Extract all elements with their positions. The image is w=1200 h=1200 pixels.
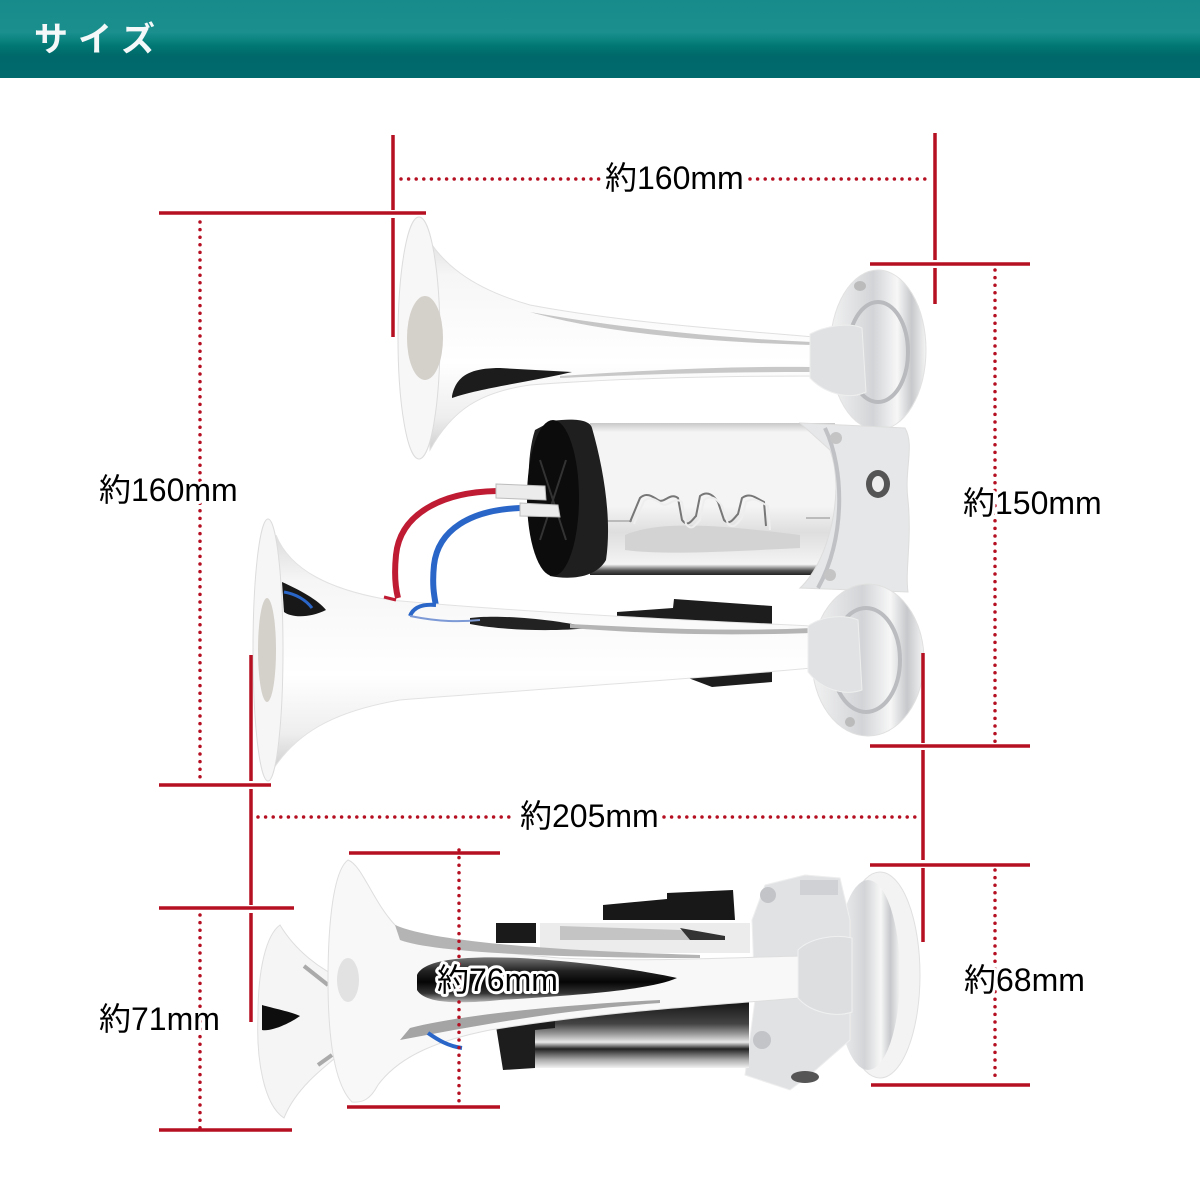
wire connectors bbox=[496, 484, 560, 517]
side view collar bbox=[798, 936, 852, 1014]
upper horn bell bbox=[398, 217, 440, 459]
lower horn collar bbox=[808, 617, 862, 692]
heading: サイズ bbox=[34, 20, 165, 59]
label 160mm width: 約160mm bbox=[605, 160, 744, 196]
product photo: lower horn bbox=[253, 519, 924, 781]
lower flange of upper horn bbox=[830, 270, 926, 430]
black connector behind horn bbox=[617, 599, 772, 687]
label 205mm: 約205mm bbox=[520, 798, 659, 834]
label 160mm height: 約160mm bbox=[99, 472, 238, 508]
side view blue wire bbox=[428, 1033, 462, 1048]
front horn dark reflection bbox=[417, 957, 677, 1002]
red wire bbox=[395, 491, 497, 598]
side view lower cylinder bbox=[534, 1000, 749, 1068]
dimension: 71mm bbox=[99, 908, 294, 1134]
dimension: 76mm bbox=[347, 850, 558, 1107]
dimension: width 160mm bbox=[393, 133, 935, 337]
label 76mm: 約76mm bbox=[437, 962, 558, 998]
dimension: height 150mm bbox=[870, 264, 1102, 746]
side view black connector bbox=[603, 890, 735, 920]
upper horn collar bbox=[810, 325, 866, 396]
front horn bbox=[328, 860, 800, 1102]
embossed wave on cylinder bbox=[630, 494, 766, 526]
compressor cylinder bbox=[590, 423, 835, 575]
rear small horn bbox=[258, 925, 345, 1118]
blue wire bbox=[433, 508, 520, 606]
lower flange bbox=[812, 584, 924, 736]
side view casting bbox=[745, 875, 850, 1090]
label 71mm: 約71mm bbox=[99, 1001, 220, 1037]
dimension: height 160mm bbox=[99, 213, 426, 785]
front horn bell stain bbox=[337, 958, 359, 1002]
label 68mm: 約68mm bbox=[964, 962, 1085, 998]
dimension: 68mm bbox=[870, 865, 1085, 1085]
header banner bbox=[0, 0, 1200, 78]
side view upper cylinder bbox=[540, 923, 750, 953]
lower horn bell bbox=[253, 519, 283, 781]
compressor end cap bbox=[529, 420, 608, 578]
upper horn bbox=[424, 232, 815, 450]
dimension: width 205mm bbox=[251, 653, 923, 1022]
label 150mm: 約150mm bbox=[963, 485, 1102, 521]
side view mounting disc bbox=[840, 872, 920, 1078]
product photo: top view of upper horn and compressor bbox=[395, 217, 926, 606]
product photo: side view of horn set bbox=[258, 860, 920, 1118]
mounting bracket bbox=[800, 423, 909, 592]
lower horn body bbox=[274, 535, 812, 768]
